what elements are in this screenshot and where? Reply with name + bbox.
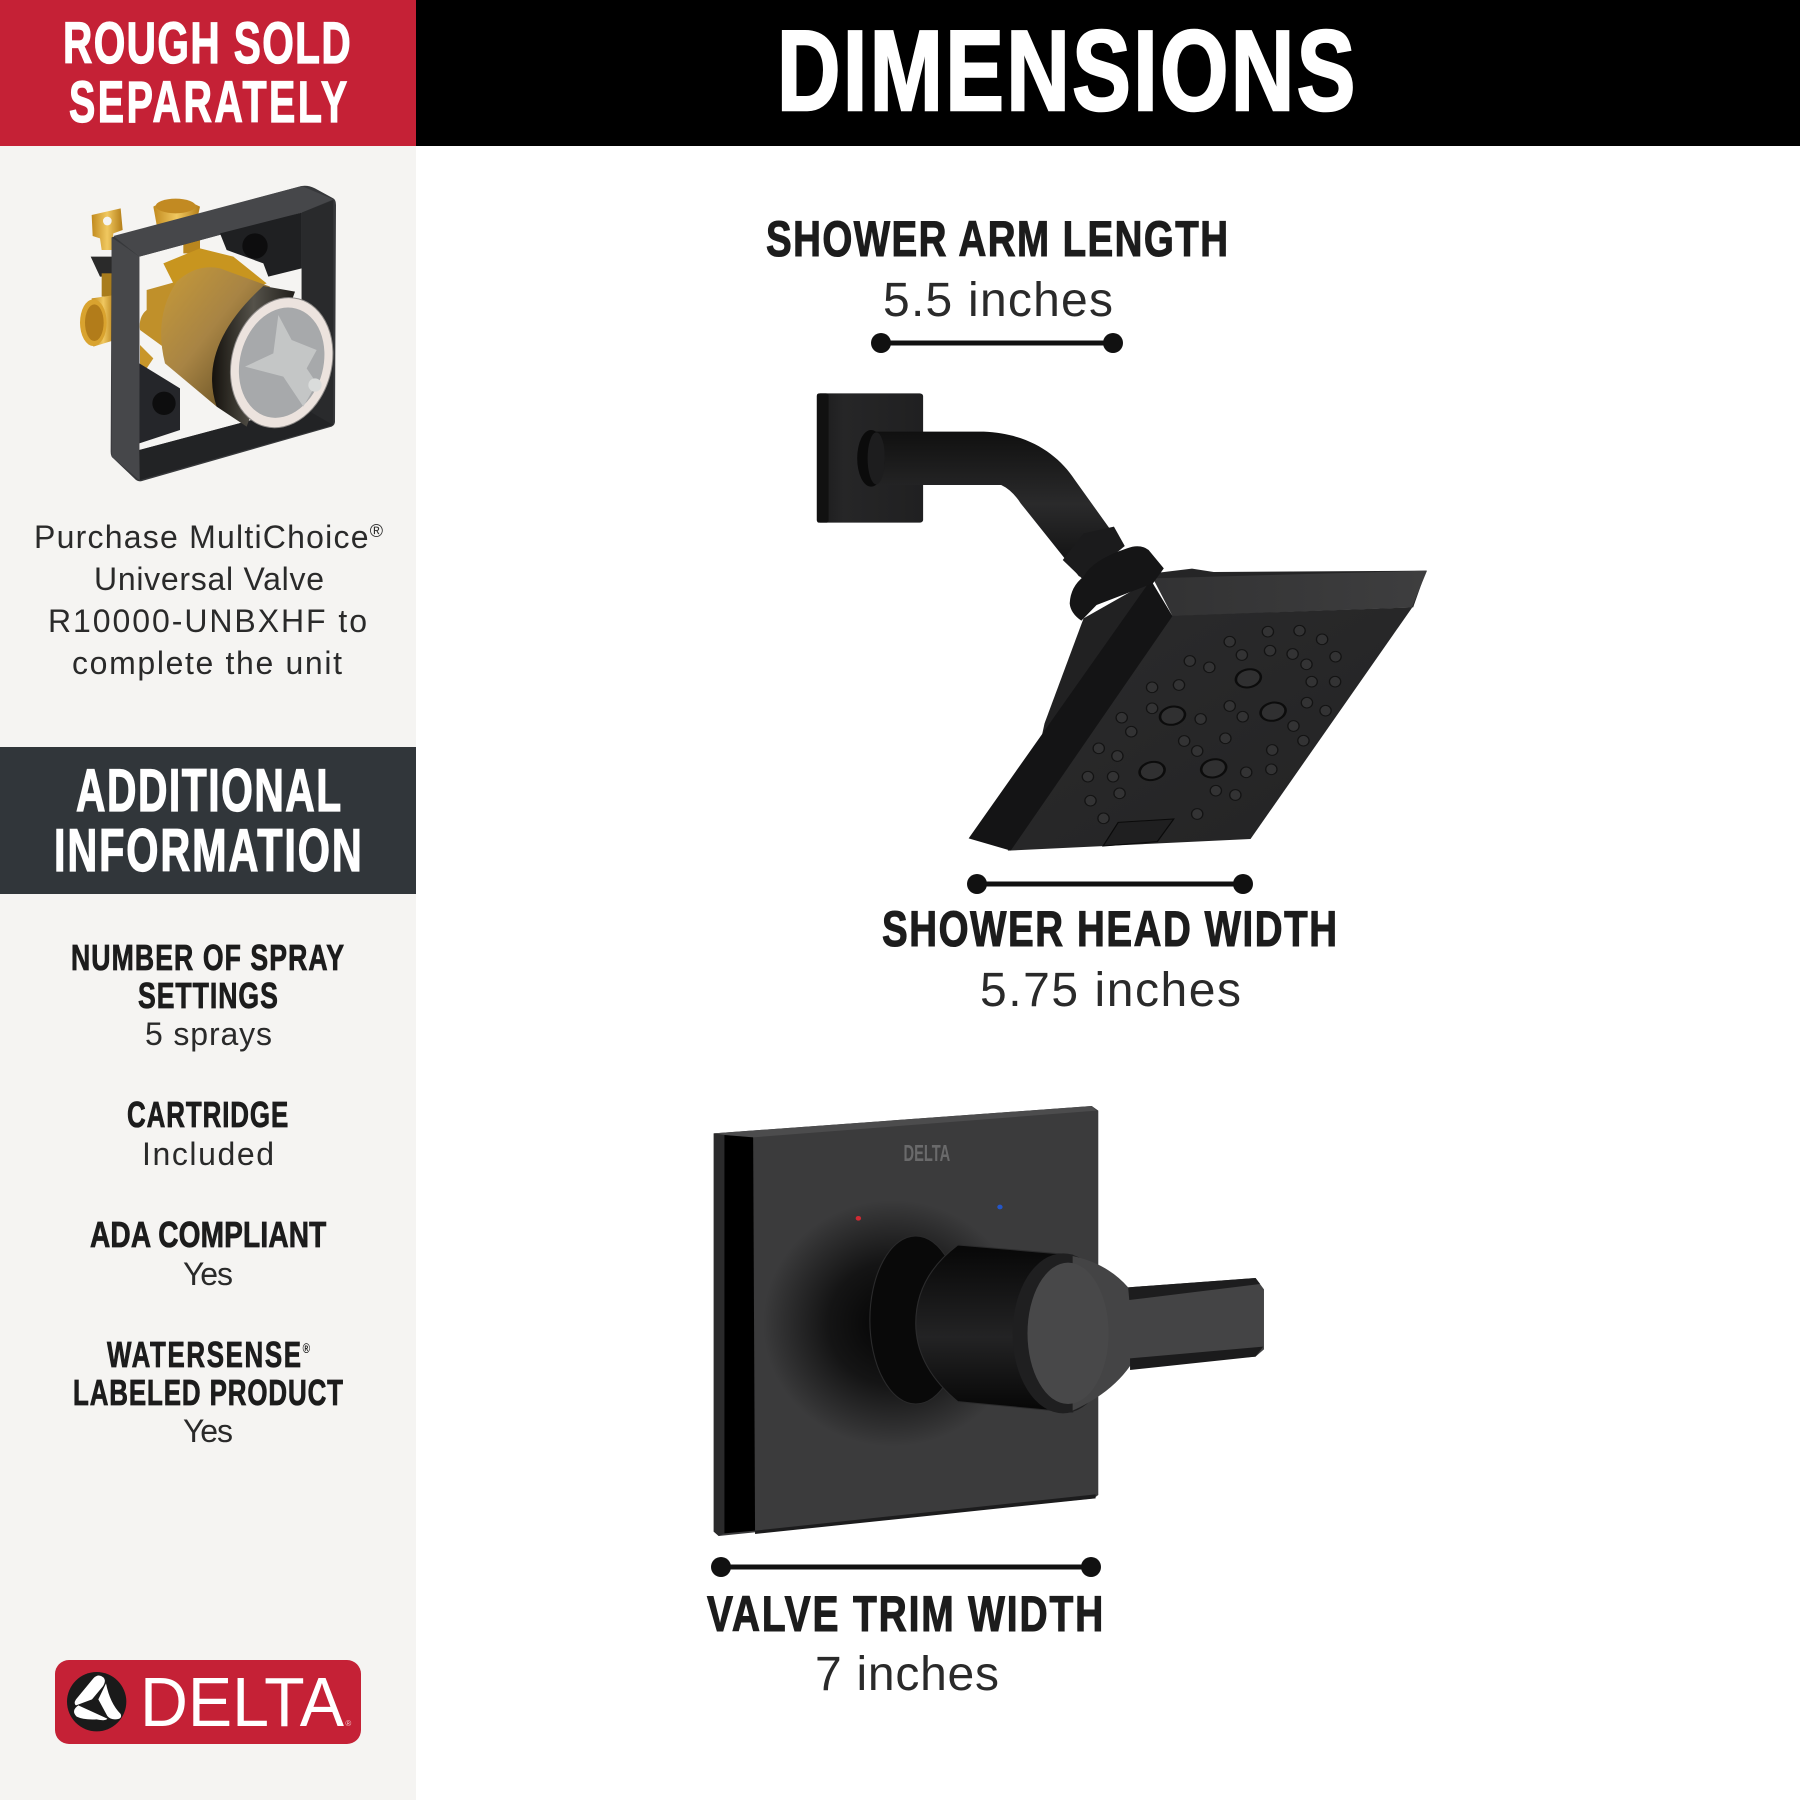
info: watersense: [73, 1335, 343, 1449]
head back body: [1040, 577, 1157, 743]
handle outer bevel: [1013, 1253, 1114, 1413]
info: watersense: ®: [303, 1340, 310, 1356]
info: cartridge: Included: [142, 1136, 274, 1172]
text: purchase note: Purchase MultiChoice: [34, 519, 369, 555]
top pipe: [153, 200, 200, 225]
image: valve trim: [714, 1106, 1264, 1536]
valve body: [140, 282, 177, 357]
plastic cap cross: [245, 315, 317, 407]
arm: [873, 432, 1123, 577]
header: rough sold separately: SEPARATELY: [69, 69, 347, 135]
wall plate: [817, 393, 923, 523]
logo: delta: ®: [345, 1719, 351, 1728]
text: purchase note: R10000-UNBXHF to: [48, 603, 367, 639]
panel: sidebar background: [0, 0, 416, 1800]
info: ada compliant: [90, 1215, 327, 1292]
black band: [212, 286, 295, 427]
logo: delta: [55, 1660, 361, 1744]
head top face: [1153, 571, 1427, 616]
heading: additional information: [0, 747, 416, 894]
label: shower arm length: 5.5 inches: [883, 274, 1113, 327]
logo: delta: DELTA: [140, 1663, 345, 1741]
handle shadow: [763, 1200, 1023, 1447]
header: rough sold separately: ROUGH SOLD: [63, 11, 351, 76]
cold indicator: [997, 1205, 1003, 1209]
arrow: valve trim width: [711, 1557, 1101, 1577]
info: ada compliant: ADA COMPLIANT: [90, 1215, 327, 1255]
label: shower head width: [882, 902, 1337, 1017]
handle face: [1027, 1263, 1109, 1404]
handle cylinder: [916, 1245, 1073, 1412]
frame: [111, 186, 336, 481]
info: cartridge: [127, 1095, 288, 1172]
text: purchase note: Universal Valve: [94, 561, 324, 597]
header: rough sold separately: [0, 0, 416, 146]
info: watersense: Yes: [183, 1413, 233, 1449]
info: spray settings: [71, 937, 344, 1052]
info: spray settings: NUMBER OF SPRAY: [71, 937, 344, 978]
text: purchase note: complete the unit: [72, 645, 342, 681]
mounting tab: [92, 208, 123, 250]
label: valve trim width: [707, 1585, 1103, 1701]
trim plate: [714, 1106, 1098, 1536]
label: valve trim width: VALVE TRIM WIDTH: [707, 1585, 1103, 1642]
heading: additional information: INFORMATION: [54, 816, 362, 884]
swivel ring: [1063, 527, 1125, 580]
label: valve trim width: 7 inches: [815, 1648, 999, 1701]
info: cartridge: CARTRIDGE: [127, 1095, 288, 1135]
heading: additional information: ADDITIONAL: [76, 757, 341, 824]
head side face: [969, 580, 1172, 851]
large nozzles: [1135, 665, 1290, 784]
arrow: shower arm length: [871, 333, 1123, 353]
plate logo text: DELTA: [904, 1141, 950, 1167]
left pipe: [92, 295, 115, 347]
info: ada compliant: Yes: [183, 1256, 233, 1292]
head front face: [1008, 607, 1412, 851]
chrome ring: [216, 286, 347, 439]
info: watersense: LABELED PRODUCT: [73, 1373, 343, 1413]
image: rough-in valve: [80, 186, 347, 481]
label: shower arm length: SHOWER ARM LENGTH: [766, 212, 1228, 267]
info: spray settings: 5 sprays: [145, 1016, 272, 1052]
arrow: shower head width: [967, 874, 1253, 894]
title: dimensions: [416, 0, 1800, 146]
image: shower head: [817, 393, 1427, 851]
lever: [1073, 1256, 1264, 1411]
text: purchase note: ®: [370, 521, 383, 541]
frame corner blocks and screws: [220, 213, 302, 277]
label: shower arm length: [766, 212, 1228, 327]
text: purchase note: [34, 519, 383, 681]
label: shower head width: SHOWER HEAD WIDTH: [882, 902, 1337, 957]
escutcheon: [870, 1236, 962, 1404]
hot indicator: [856, 1216, 861, 1221]
swivel joint: [1070, 546, 1164, 621]
info: watersense: WATERSENSE: [107, 1335, 301, 1375]
nozzles: [1082, 625, 1341, 824]
title: dimensions: DIMENSIONS: [777, 7, 1355, 135]
info: spray settings: SETTINGS: [138, 975, 278, 1016]
lever tab: [1103, 819, 1174, 846]
label: shower head width: 5.75 inches: [980, 964, 1241, 1017]
